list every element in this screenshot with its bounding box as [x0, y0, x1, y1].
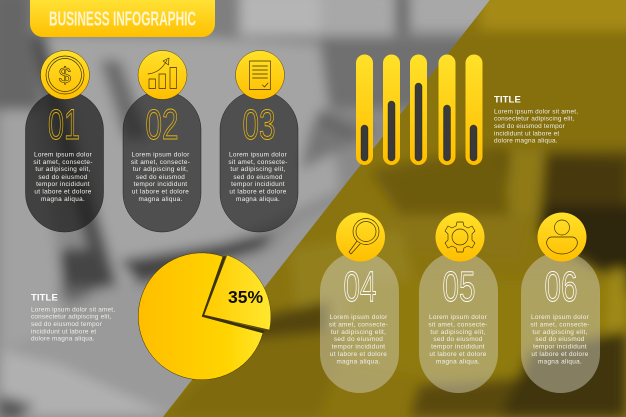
- panel: step 01: ut labore et dolore: [34, 188, 92, 196]
- panel: step 03: 03: [242, 101, 276, 149]
- panel: step 02: [123, 50, 201, 232]
- panel: step 03: tempor incididunt: [231, 181, 285, 188]
- panel: step 03: magna aliqua.: [236, 196, 280, 203]
- panel: step 05: 05: [442, 263, 476, 311]
- panel: step 05: sed do eiusmod: [433, 336, 483, 343]
- text block: chart title: [494, 94, 578, 144]
- panel: step 05: [419, 212, 498, 393]
- panel: step 01: [26, 50, 104, 232]
- panel: step 04: ut labore et dolore: [330, 351, 387, 358]
- text block: pie title: consectetur adipiscing elit,: [31, 314, 112, 320]
- panel: step 03: sit amet, consecte-: [228, 159, 288, 166]
- panel: step 05: Lorem ipsum dolor: [429, 314, 488, 321]
- panel: step 05: tempor incididunt: [431, 344, 485, 350]
- panel: step 05: ut labore et dolore: [429, 351, 487, 358]
- panel: step 04: tempor incididunt: [332, 344, 385, 350]
- panel: step 01: sed do eiusmod: [38, 174, 88, 181]
- text block: pie title: Lorem ipsum dolor sit amet,: [31, 306, 115, 314]
- panel: step 01: Lorem ipsum dolor: [34, 152, 93, 158]
- text block: chart title: TITLE: [494, 94, 521, 106]
- icon: document: [236, 50, 284, 100]
- panel: step 06: magna aliqua.: [538, 358, 582, 366]
- icon: gear: [436, 212, 484, 262]
- panel: step 04: sed do eiusmod: [334, 336, 383, 343]
- panel: step 02: 02: [146, 101, 178, 149]
- panel: step 06: Lorem ipsum dolor: [531, 314, 590, 321]
- panel: step 06: sed do eiusmod: [535, 336, 585, 343]
- text block: chart title: dolore magna aliqua.: [494, 138, 558, 144]
- panel: step 04: tur adipiscing elit,: [331, 329, 386, 336]
- panel: step 06: 06: [544, 263, 578, 311]
- pie slice: 35%: 35%: [228, 287, 263, 307]
- panel: step 03: sed do eiusmod: [233, 174, 283, 181]
- panel: step 01: tur adipiscing elit,: [35, 166, 91, 173]
- panel: step 05: sit amet, consecte-: [428, 322, 488, 328]
- background: grey laptop photo: [0, 0, 490, 417]
- panel: step 01: magna aliqua.: [41, 196, 85, 203]
- panel: step 03: Lorem ipsum dolor: [229, 152, 288, 158]
- panel: step 06: [521, 212, 600, 393]
- panel: step 02: sed do eiusmod: [136, 174, 185, 181]
- panel: step 02: Lorem ipsum dolor: [131, 152, 190, 158]
- panel: step 06: tempor incididunt: [533, 344, 587, 350]
- bar chart: [356, 54, 482, 165]
- panel: step 02: sit amet, consecte-: [131, 159, 190, 166]
- panel: step 04: 04: [344, 263, 376, 311]
- pie chart: [138, 253, 271, 380]
- icon: dollar coin: $: [59, 63, 71, 88]
- panel: step 04: Lorem ipsum dolor: [329, 314, 388, 321]
- panel: step 03: ut labore et dolore: [229, 188, 287, 196]
- icon: dollar coin: [40, 50, 90, 100]
- icon: user: [538, 212, 586, 262]
- panel: step 01: 01: [48, 101, 80, 149]
- icon: magnifier: [336, 212, 385, 262]
- text block: chart title: consectetur adipiscing elit,: [494, 116, 575, 122]
- text block: chart title: sed do eiusmod tempor: [494, 123, 566, 130]
- panel: step 02: tur adipiscing elit,: [133, 166, 188, 173]
- panel: step 05: magna aliqua.: [436, 358, 480, 366]
- text block: pie title: dolore magna aliqua.: [31, 336, 95, 342]
- text block: pie title: [31, 292, 115, 342]
- panel: step 02: magna aliqua.: [138, 196, 183, 203]
- panel: step 06: sit amet, consecte-: [530, 322, 590, 328]
- panel: step 03: [220, 50, 298, 232]
- text block: pie title: TITLE: [31, 292, 58, 304]
- panel: step 01: tempor incididunt: [36, 181, 90, 188]
- panel: step 04: sit amet, consecte-: [329, 322, 388, 328]
- text block: pie title: incididunt ut labore et: [31, 328, 96, 336]
- icon: growth chart: [138, 50, 187, 100]
- panel: step 05: tur adipiscing elit,: [430, 329, 486, 336]
- text block: pie title: sed do eiusmod tempor: [31, 321, 103, 328]
- text block: chart title: incididunt ut labore et: [494, 130, 559, 138]
- panel: step 04: [320, 212, 399, 393]
- header banner: [30, 0, 215, 37]
- background: yellow tinted photo panel: [163, 0, 626, 417]
- panel: step 06: tur adipiscing elit,: [532, 329, 588, 336]
- panel: step 03: tur adipiscing elit,: [230, 166, 286, 173]
- heading: BUSINESS INFOGRAPHIC: [49, 8, 196, 30]
- text block: chart title: Lorem ipsum dolor sit amet,: [494, 108, 578, 116]
- panel: step 04: magna aliqua.: [336, 358, 381, 366]
- panel: step 01: sit amet, consecte-: [33, 159, 93, 166]
- panel: step 02: ut labore et dolore: [132, 188, 189, 196]
- panel: step 06: ut labore et dolore: [531, 351, 589, 358]
- panel: step 02: tempor incididunt: [134, 181, 187, 188]
